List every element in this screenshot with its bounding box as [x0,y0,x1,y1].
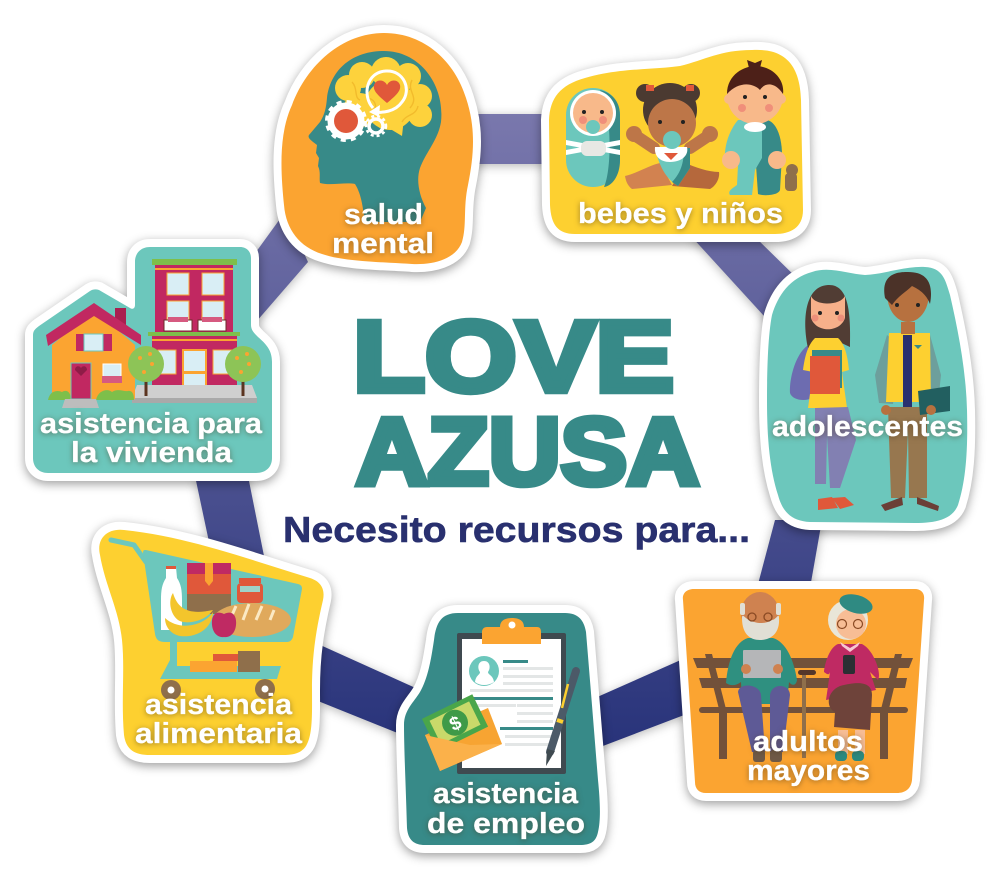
card shape [404,613,600,845]
icon: girl with books [790,285,856,510]
card shape [33,247,272,473]
icon: pen [546,671,576,766]
icon: sidewalk [132,385,257,403]
label [135,689,303,750]
label [427,778,585,840]
label: salud [344,199,423,231]
ring connecting the seven cards [195,114,822,749]
icon: boy with jacket [875,272,950,511]
icon: cane [798,670,816,758]
icon: orange house [46,303,141,408]
label: de empleo [427,808,585,840]
label: asistencia [145,689,293,721]
icon: sitting baby [625,83,719,189]
icon: swaddled baby [566,88,620,187]
title: LOVE AZUSA [353,301,699,505]
icon: apartment building [148,259,240,393]
label: alimentaria [135,718,303,750]
label: adolescentes [772,411,963,443]
label [747,726,870,787]
icon: clipboard resume [457,618,566,774]
icon: shopping cart [111,540,302,700]
panel: asistencia de empleo [404,613,600,845]
icon: envelope with money: $ [446,712,465,736]
card shape [281,33,473,264]
panel: salud mental [281,33,473,264]
icon: groceries [161,563,291,637]
panel: asistencia para la vivienda [33,247,272,473]
title: LOVE AZUSA: LOVE [353,301,674,413]
card shape [99,530,324,755]
icon: head with brain [309,51,441,222]
panel: adolescentes [767,267,967,523]
icon: orange trees [128,346,261,396]
subtitle: Necesito recursos para... [283,509,750,550]
icon: bench [693,654,913,759]
panel: asistencia alimentaria [99,530,324,755]
label: adultos [753,726,863,758]
label: asistencia [433,778,579,810]
icon: grandfather with tablet [726,592,797,762]
panel: bebes y niños [549,50,803,234]
card shape [767,267,967,523]
icon: standing toddler [722,60,798,195]
label: bebes y niños [578,198,783,230]
label: asistencia para [40,408,263,440]
label: mental [332,228,434,260]
label [332,199,434,260]
panel: adultos mayores [683,589,924,793]
title: LOVE AZUSA: AZUSA [356,399,699,505]
card shape [549,50,803,234]
card shape [683,589,924,793]
icon: grandmother with phone [824,591,879,761]
label [40,408,263,469]
label: mayores [747,755,870,787]
label: la vivienda [71,437,233,469]
icon: envelope with money [422,694,502,771]
